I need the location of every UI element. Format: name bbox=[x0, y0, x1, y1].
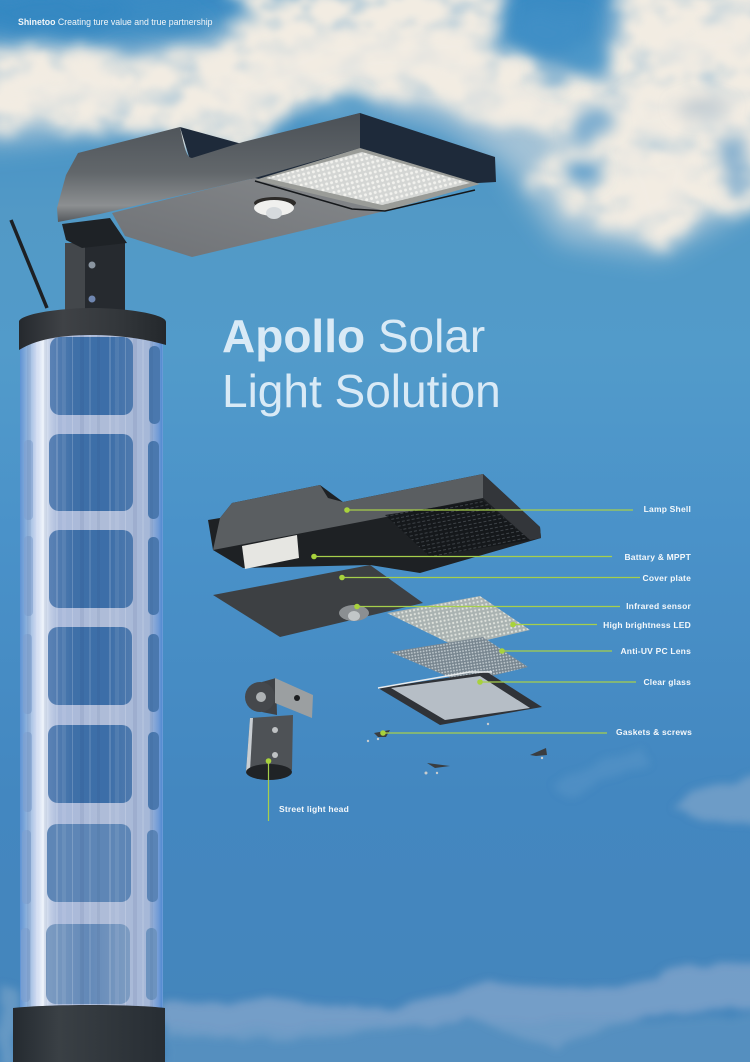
clouds: lower bbox=[0, 745, 750, 1062]
callout labels: Clear glass bbox=[643, 677, 691, 687]
brand tagline: Shinetoo Creating ture value and true partnership bbox=[18, 17, 213, 27]
lamp head bbox=[57, 113, 496, 257]
rear dark shell bbox=[180, 113, 496, 211]
callout labels: Street light head bbox=[279, 804, 349, 814]
infrared sensor part bbox=[339, 605, 369, 621]
clouds: upper band bbox=[0, 0, 750, 248]
motion sensor bbox=[254, 197, 296, 219]
front shell face bbox=[57, 113, 360, 222]
antenna bbox=[11, 220, 47, 308]
title: Apollo Solar bbox=[222, 310, 485, 362]
LED panel bbox=[255, 148, 480, 211]
clear glass part bbox=[378, 672, 542, 725]
callout labels: Gaskets & screws bbox=[616, 727, 692, 737]
bottom base bbox=[13, 1005, 165, 1062]
pole bracket bbox=[65, 243, 125, 311]
callout labels: Anti-UV PC Lens bbox=[620, 646, 691, 656]
underside plate bbox=[112, 178, 385, 257]
gaskets and screws bbox=[367, 723, 547, 774]
callout labels: Infrared sensor bbox=[626, 601, 691, 611]
clouds: blue gaps bbox=[0, 0, 750, 193]
cloud haze bbox=[0, 0, 750, 255]
bracket top bbox=[62, 218, 127, 248]
solar tube bbox=[20, 333, 163, 1008]
callout labels: Lamp Shell bbox=[644, 504, 691, 514]
callout labels bbox=[279, 504, 692, 814]
top collar bbox=[19, 308, 166, 350]
callout labels: Cover plate bbox=[642, 573, 691, 583]
tube solar cells bbox=[21, 337, 160, 1004]
cover plate part bbox=[213, 565, 423, 637]
callout labels: Battary & MPPT bbox=[624, 552, 692, 562]
exploded view bbox=[208, 474, 692, 821]
title: Light Solution bbox=[222, 365, 501, 417]
callout labels: High brightness LED bbox=[603, 620, 691, 630]
street light head part bbox=[245, 678, 313, 780]
clouds: bright cores bbox=[0, 20, 750, 225]
street light pole bbox=[11, 220, 166, 1062]
lens part bbox=[390, 637, 528, 683]
LED board part bbox=[387, 596, 530, 647]
product label sticker bbox=[242, 535, 299, 569]
callout lines bbox=[266, 507, 640, 821]
lamp shell part bbox=[208, 474, 541, 573]
